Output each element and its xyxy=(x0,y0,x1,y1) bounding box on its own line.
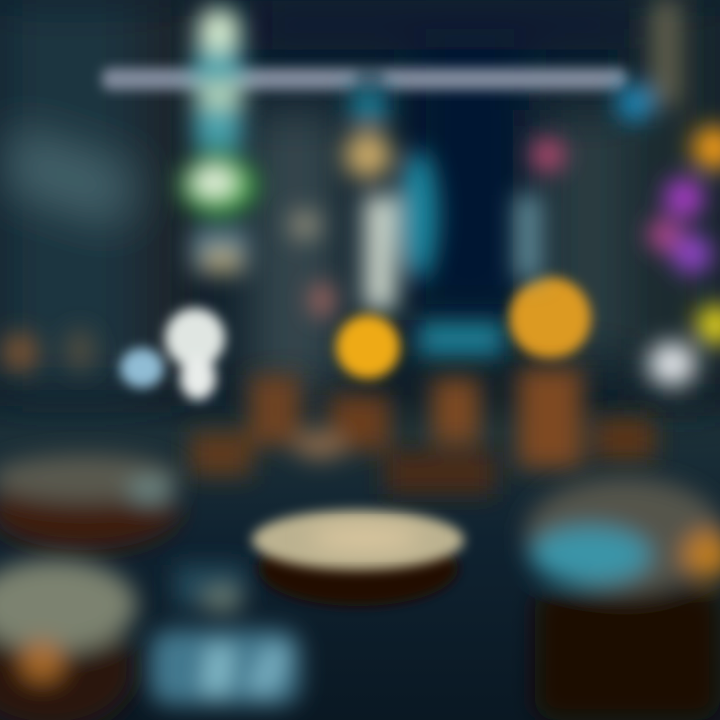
right bowl xyxy=(525,477,720,720)
orange circle centre xyxy=(336,315,400,379)
orange circle right xyxy=(509,277,591,359)
light reflections on floor xyxy=(150,565,300,705)
brown columns xyxy=(190,368,655,494)
centre bowl xyxy=(252,510,464,606)
background buildings xyxy=(0,0,720,400)
right side lights xyxy=(515,0,720,386)
centre column of lights xyxy=(289,88,504,356)
white glow cluster xyxy=(120,308,225,400)
bowl bottom left xyxy=(0,559,137,720)
left bowl xyxy=(0,454,180,550)
banner band xyxy=(102,68,627,90)
left column of coloured lights xyxy=(180,8,256,273)
street lamps left xyxy=(2,328,96,372)
